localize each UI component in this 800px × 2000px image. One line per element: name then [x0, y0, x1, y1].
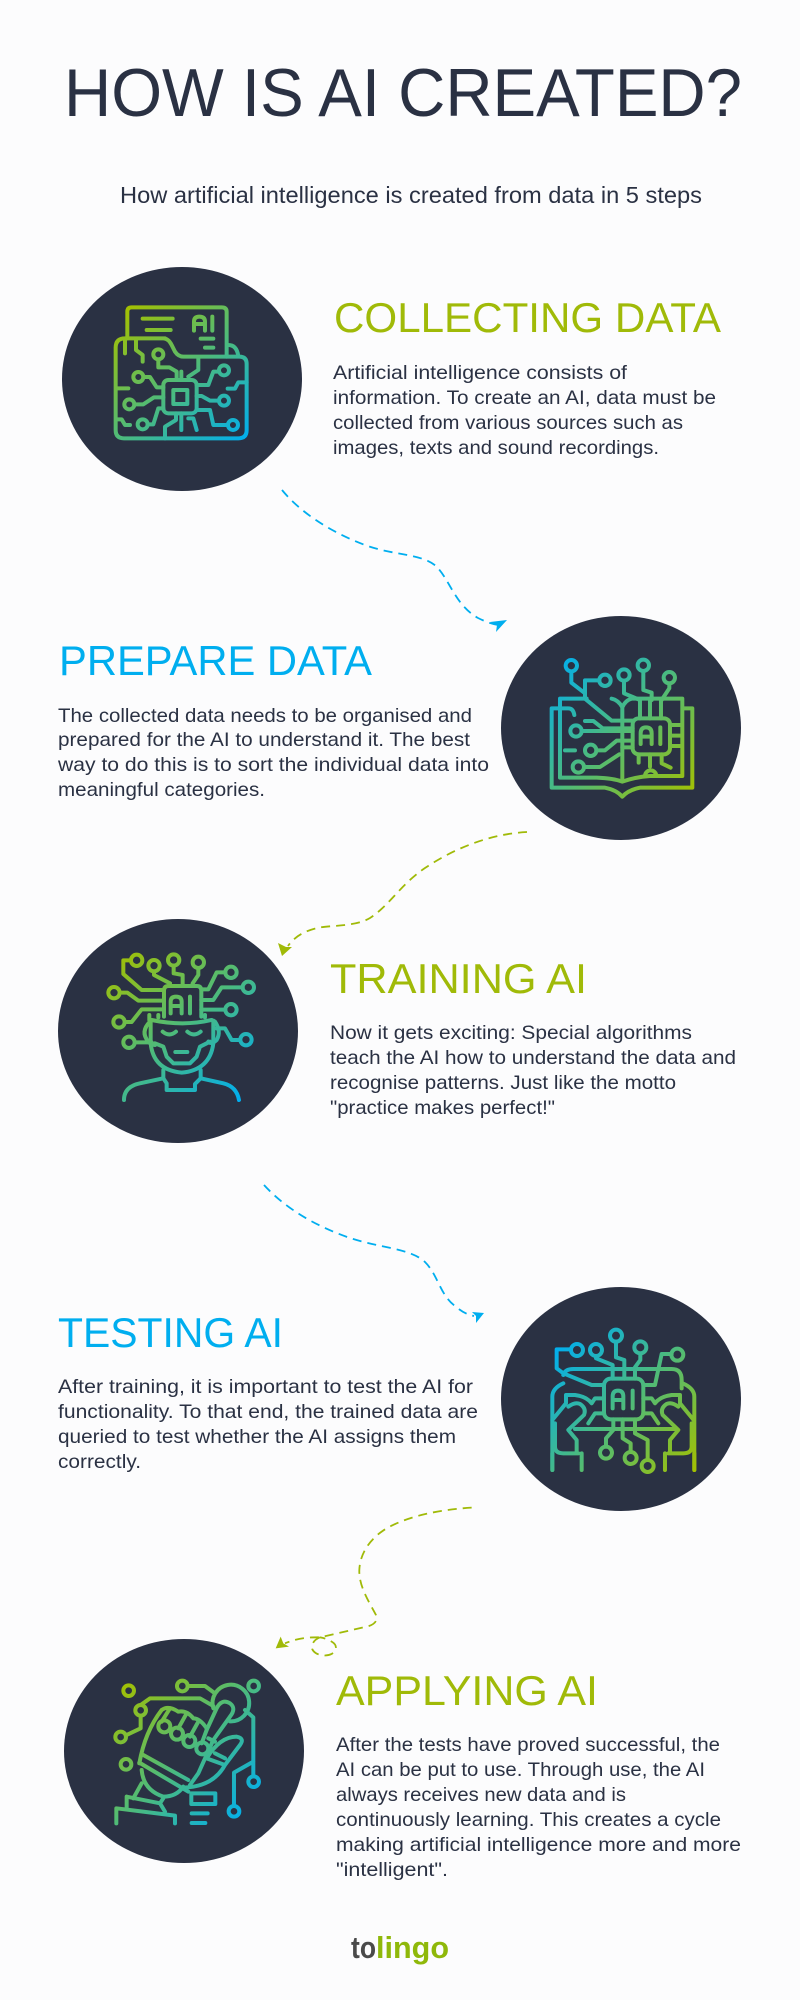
text block: applying AI — [336, 1667, 741, 1881]
subtitle: How artificial intelligence is created from data in 5 steps — [120, 182, 702, 208]
text block: collecting data: Artificial intelligence consists of — [333, 362, 628, 384]
text block: training AI — [330, 955, 736, 1119]
title: HOW IS AI CREATED? — [64, 55, 742, 131]
text block: testing AI: queried to test whether the AI assigns them — [58, 1426, 456, 1448]
text block: prepare data: meaningful categories. — [58, 779, 265, 801]
text block: training AI: TRAINING AI — [330, 955, 587, 1002]
panel: step 4 testing AI — [58, 1287, 741, 1511]
text block: applying AI: making artificial intelligence more and more — [336, 1834, 741, 1856]
text block: collecting data: COLLECTING DATA — [334, 294, 721, 341]
text block: collecting data: images, texts and sound recordings. — [333, 437, 659, 459]
text block: prepare data: prepared for the AI to understand it. The best — [58, 729, 471, 751]
icon: hands holding AI chip on dark circle — [501, 1287, 741, 1511]
icon: robot hand on dark circle — [64, 1639, 304, 1863]
text block: testing AI: After training, it is important to test the AI for — [58, 1376, 474, 1398]
text block: testing AI: TESTING AI — [58, 1309, 283, 1356]
text block: prepare data: way to do this is to sort the individual data into — [57, 754, 489, 776]
text block: applying AI: continuously learning. This creates a cycle — [336, 1809, 721, 1831]
arrow: step 2 to step 3 — [278, 832, 527, 956]
text block: prepare data: The collected data needs to be organised and — [58, 705, 472, 727]
text block: prepare data: PREPARE DATA — [59, 637, 372, 684]
text block: prepare data — [57, 637, 489, 801]
logo: tolingo: to — [351, 1930, 376, 1965]
arrow: step 4 to step 5 — [276, 1508, 472, 1656]
text block: training AI: teach the AI how to understand the data and — [330, 1047, 736, 1069]
panel: step 3 training AI — [58, 919, 736, 1143]
text block: applying AI: After the tests have proved successful, the — [336, 1734, 720, 1756]
text block: training AI: recognise patterns. Just like the motto — [330, 1072, 676, 1094]
text block: testing AI — [58, 1309, 478, 1473]
text block: training AI: "practice makes perfect!" — [330, 1097, 555, 1119]
panel: step 1 collecting data — [62, 267, 721, 491]
text block: collecting data: information. To create an AI, data must be — [333, 387, 716, 409]
icon: AI folder on dark circle — [62, 267, 302, 491]
arrow: step 3 to step 4 — [264, 1185, 484, 1323]
text block: testing AI: functionality. To that end, the trained data are — [58, 1401, 478, 1423]
text block: applying AI: always receives new data and is — [336, 1784, 626, 1806]
text block: training AI: Now it gets exciting: Special algorithms — [330, 1022, 692, 1044]
text block: collecting data — [333, 294, 721, 459]
arrow: step 1 to step 2 — [282, 490, 507, 632]
text block: testing AI: correctly. — [58, 1451, 141, 1473]
panel: step 2 prepare data — [57, 616, 741, 840]
text block: applying AI: APPLYING AI — [336, 1667, 598, 1714]
logo: tolingo: lingo — [376, 1930, 449, 1965]
text block: collecting data: collected from various sources such as — [333, 412, 683, 434]
text block: applying AI: "intelligent". — [336, 1859, 448, 1881]
text block: applying AI: AI can be put to use. Through use, the AI — [336, 1759, 705, 1781]
panel: step 5 applying AI — [64, 1639, 741, 1881]
icon: AI head on dark circle — [58, 919, 298, 1143]
icon: AI book on dark circle — [501, 616, 741, 840]
